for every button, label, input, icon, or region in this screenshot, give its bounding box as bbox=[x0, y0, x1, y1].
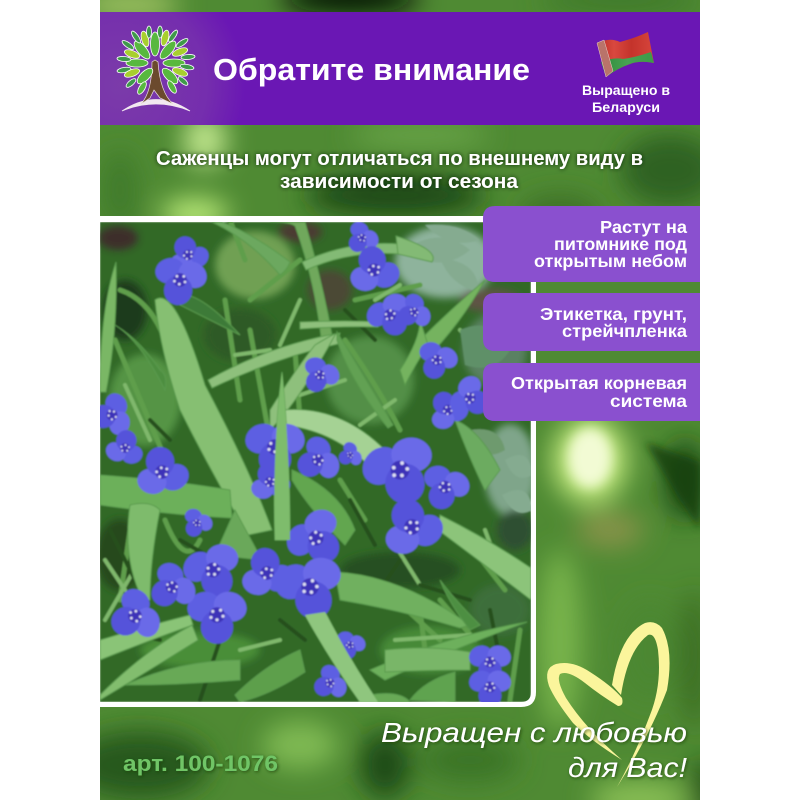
photo: grey-green leaves at right bbox=[418, 224, 531, 514]
slogan bbox=[381, 717, 687, 783]
photo: background foliage bbox=[96, 222, 536, 674]
callout: packaging bbox=[483, 293, 700, 351]
callout: root system: система bbox=[610, 391, 687, 411]
callout: packaging: Этикетка, грунт, bbox=[540, 304, 687, 324]
photo frame: white border bbox=[100, 216, 536, 707]
label: grown in Belarus: Беларуси bbox=[592, 99, 660, 115]
header banner bbox=[100, 12, 700, 125]
logo: ground swoosh bbox=[122, 100, 190, 111]
callout: outdoors: питомнике под bbox=[554, 234, 687, 254]
photo: spiderwort flowers and leaves bbox=[88, 214, 536, 709]
logo: trunk bbox=[141, 60, 173, 104]
subtitle bbox=[156, 148, 643, 193]
photo: grass texture bbox=[105, 220, 520, 700]
article number: арт. 100-1076 bbox=[123, 751, 278, 776]
callout: outdoors: Растут на bbox=[600, 217, 687, 237]
heading: Обратите внимание bbox=[213, 52, 530, 87]
logo: leaves bbox=[117, 26, 195, 96]
callout: root system: Открытая корневая bbox=[511, 373, 687, 393]
slogan: Выращен с любовью bbox=[381, 717, 687, 748]
icon: tree logo bbox=[117, 26, 195, 111]
icon: yellow heart bbox=[547, 622, 670, 787]
callout: root system bbox=[483, 363, 700, 421]
callout: packaging: стрейчпленка bbox=[562, 321, 687, 341]
label: grown in Belarus: Выращено в bbox=[582, 82, 670, 98]
subtitle: зависимости от сезона bbox=[280, 171, 519, 193]
photo: flowers bbox=[88, 214, 514, 709]
photo: leaf blades bbox=[100, 222, 531, 702]
callout: outdoors: открытым небом bbox=[534, 251, 687, 271]
subtitle: Саженцы могут отличаться по внешнему виду в bbox=[156, 148, 643, 170]
label: grown in Belarus bbox=[582, 82, 670, 115]
callout: outdoors bbox=[483, 206, 700, 282]
icon: Belarus flag bbox=[597, 32, 654, 77]
slogan: для Вас! bbox=[568, 752, 687, 783]
